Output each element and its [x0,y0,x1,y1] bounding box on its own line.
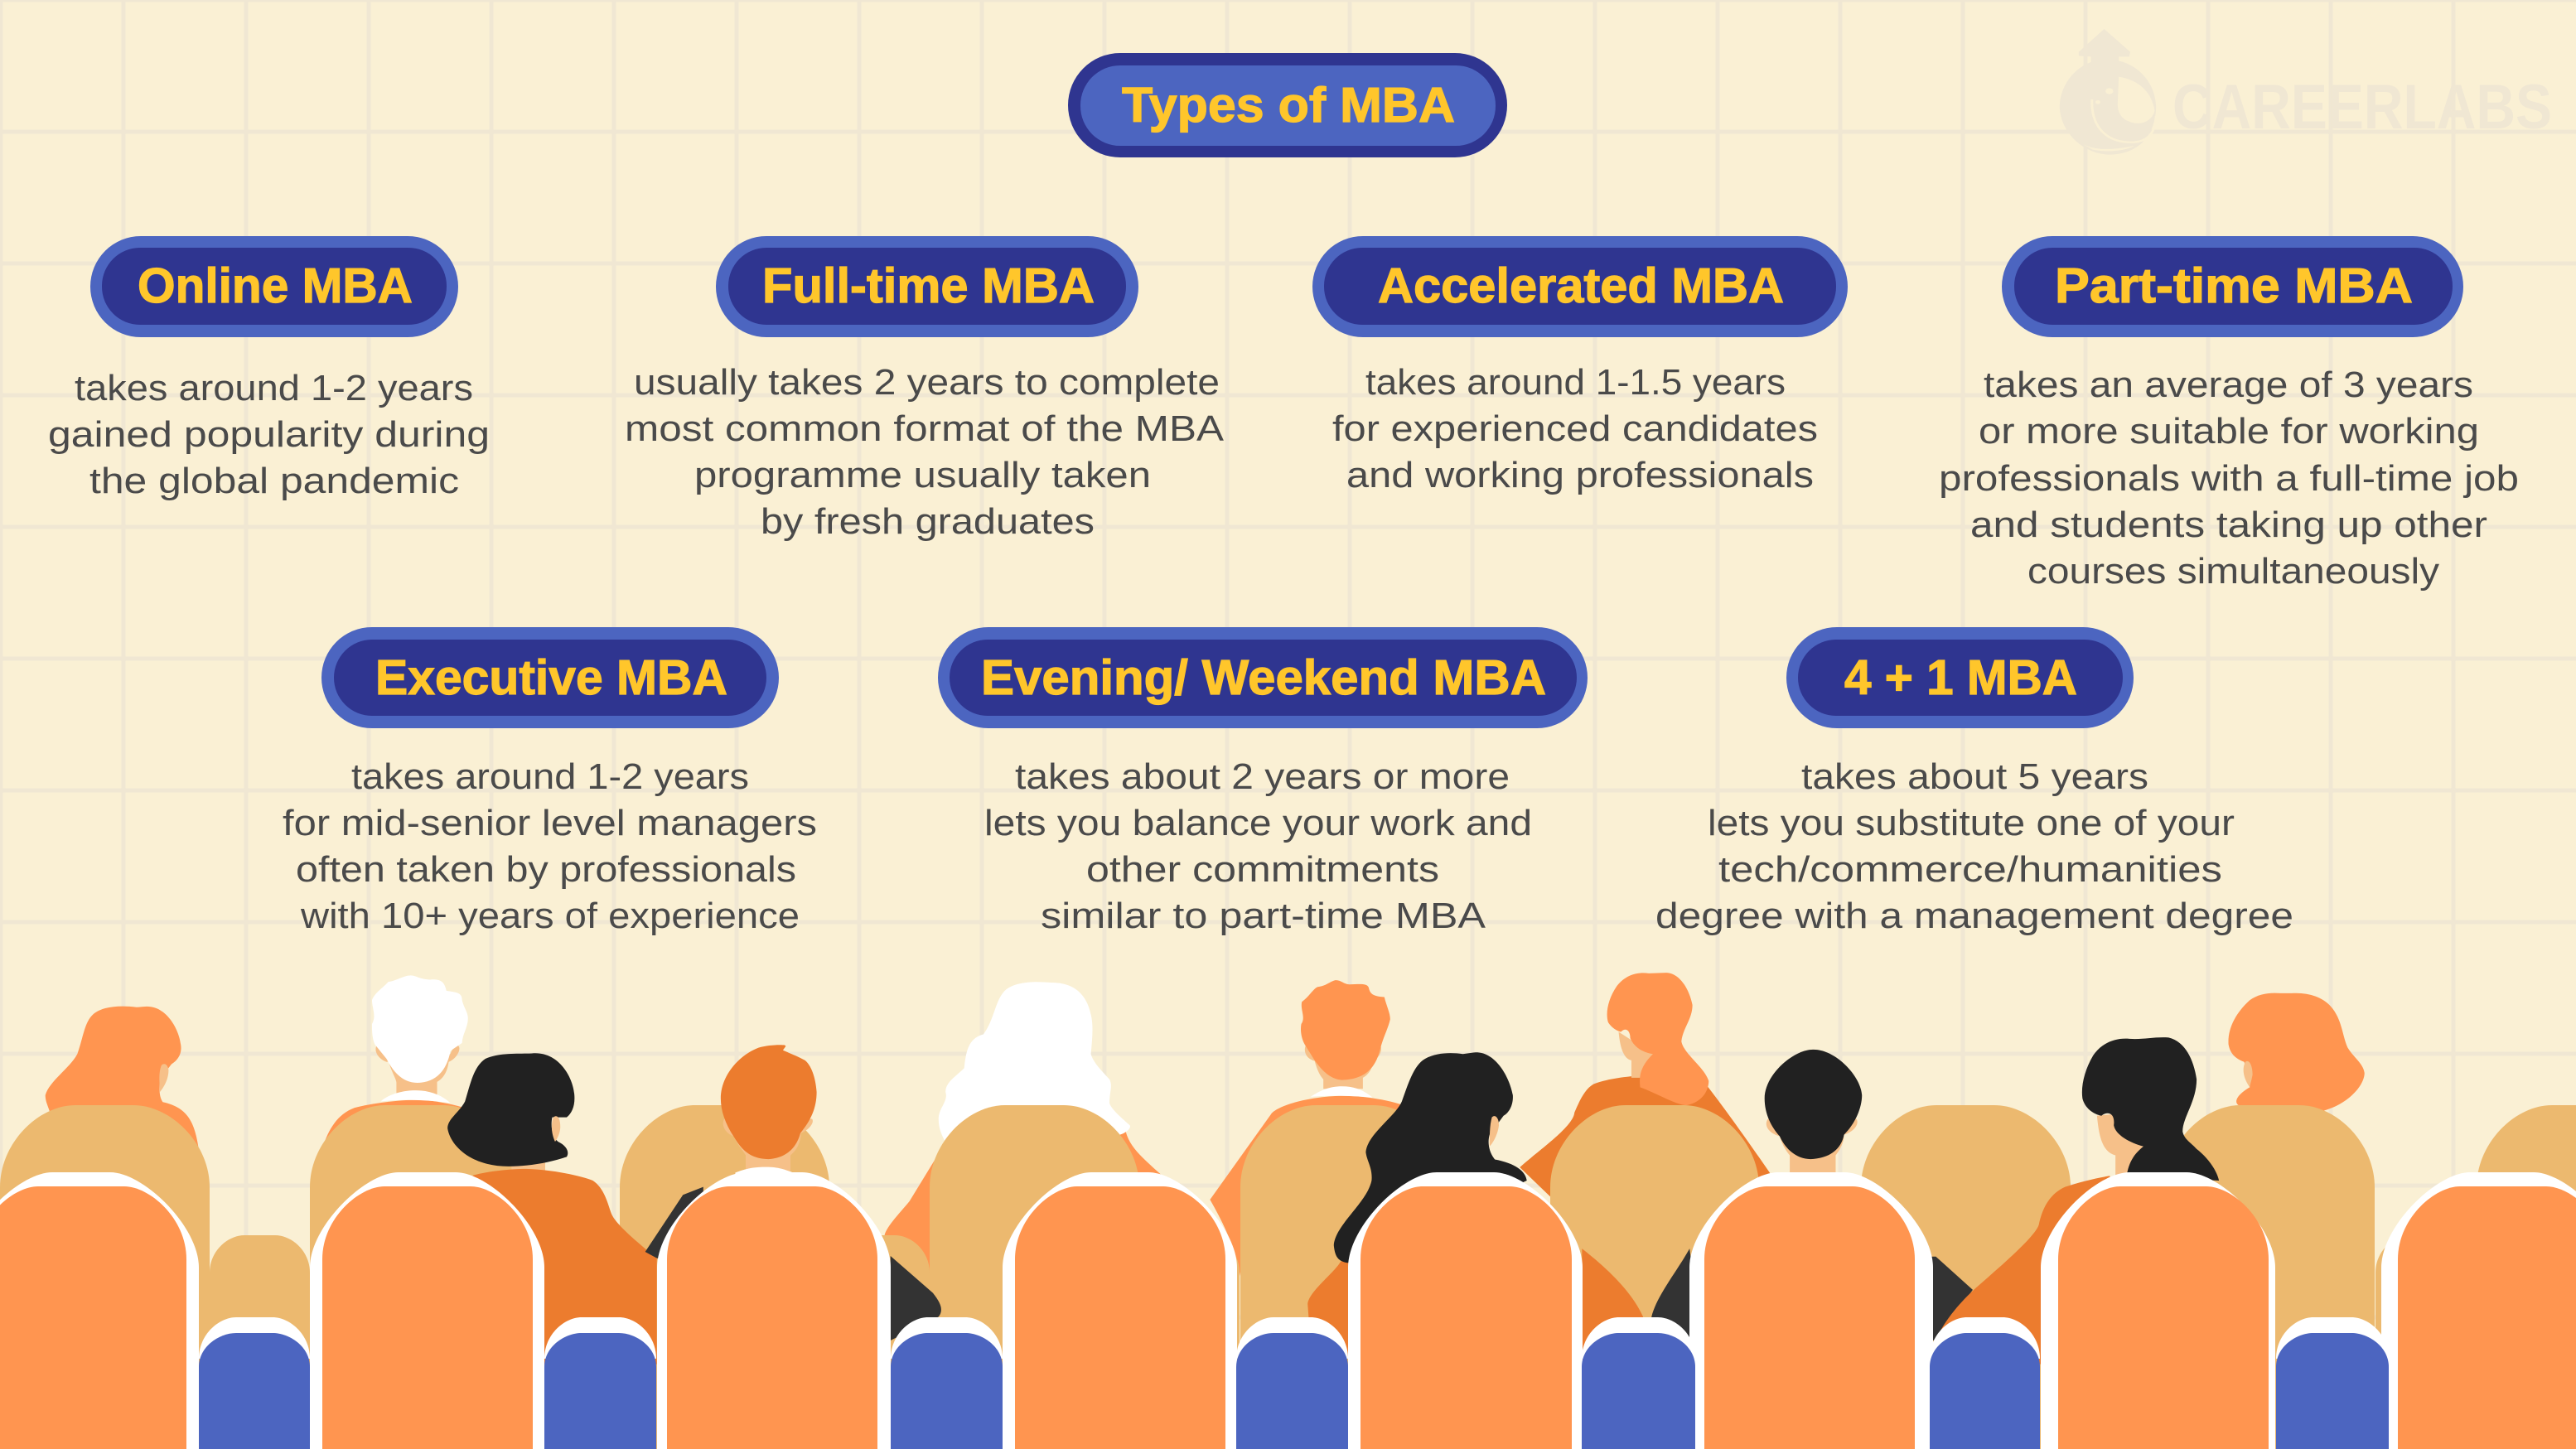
person: white-haired man [322,975,468,1174]
panel: Full-time MBA [625,236,1225,542]
watermark: CareerLabs logo [2060,29,2552,155]
person: black-haired man in suit [1651,1050,1973,1364]
person: black-haired woman with ponytail [1936,1037,2219,1364]
person: curly orange-haired man [1210,980,1402,1276]
heading pill: Online MBA [138,258,413,313]
person: dark-orange-haired man in suit [645,1045,941,1340]
panel: 4 + 1 MBA [1655,627,2293,936]
description [984,756,1532,936]
blue seats [199,1317,2389,1449]
description: takes around 1-2 years [351,756,749,797]
heading pill: Full-time MBA [762,258,1095,313]
title pill: Types of MBA [1122,78,1455,133]
orange front chairs [0,1172,2576,1449]
panel: Evening/ Weekend MBA [938,627,1588,936]
description [1332,362,1818,495]
tan chairs [0,1105,2576,1449]
heading pill [716,236,1138,337]
description: lets you balance your work and [984,803,1532,843]
description: by fresh graduates [761,501,1095,542]
front row people [447,1037,2219,1364]
description [625,362,1225,542]
panel: Part-time MBA [1939,236,2519,592]
description: for experienced candidates [1332,408,1818,449]
heading pill [1312,236,1848,337]
heading pill [938,627,1588,728]
person: black bob-haired woman [447,1053,657,1364]
description: takes an average of 3 years [1984,365,2473,405]
description: takes about 2 years or more [1015,756,1510,797]
heading pill: Part-time MBA [2055,258,2413,313]
description: often taken by professionals [296,849,796,890]
description: takes about 5 years [1801,756,2148,797]
person: orange-haired woman with bun [1520,973,1770,1316]
heading pill: Accelerated MBA [1378,258,1784,313]
title pill [1068,53,1507,157]
heading pill: Evening/ Weekend MBA [981,650,1546,705]
description [1655,756,2293,936]
description: usually takes 2 years to complete [634,362,1220,403]
person: black long-haired woman [1307,1052,1527,1358]
person: orange-haired woman [46,1007,199,1149]
description: degree with a management degree [1655,896,2293,936]
description: and working professionals [1346,455,1814,495]
panel: Online MBA [48,236,490,501]
person: white long-haired woman [885,982,1161,1278]
panel: Executive MBA [283,627,817,936]
heading pill: Executive MBA [375,650,727,705]
description: or more suitable for working [1979,411,2479,452]
description: similar to part-time MBA [1041,896,1486,936]
description: for mid-senior level managers [283,803,817,843]
person: arm in front of tan chair [1582,1249,1643,1364]
description: professionals with a full-time job [1939,458,2519,499]
heading pill [90,236,458,337]
description: tech/commerce/humanities [1718,849,2222,890]
description: most common format of the MBA [625,408,1225,449]
person: orange-haired woman, right [2228,993,2365,1135]
heading pill [1786,627,2134,728]
description: programme usually taken [694,455,1151,495]
description [283,756,817,936]
description: lets you substitute one of your [1708,803,2235,843]
illustration: audience seen from behind [0,973,2576,1449]
back row people [46,973,2365,1316]
description [1939,365,2519,592]
description [48,368,490,501]
heading pill: 4 + 1 MBA [1844,650,2077,705]
description: takes around 1-1.5 years [1365,362,1786,403]
description: takes around 1-2 years [75,368,473,408]
description: gained popularity during [48,414,490,455]
heading pill [2002,236,2463,337]
description: and students taking up other [1970,505,2487,545]
heading pill [321,627,779,728]
description: with 10+ years of experience [300,896,800,936]
panel: Accelerated MBA [1312,236,1848,495]
small tan seats [210,1235,2476,1449]
description: other commitments [1086,849,1439,890]
description: courses simultaneously [2027,551,2439,592]
icon: rocket logo [2060,29,2156,155]
description: the global pandemic [89,461,459,501]
